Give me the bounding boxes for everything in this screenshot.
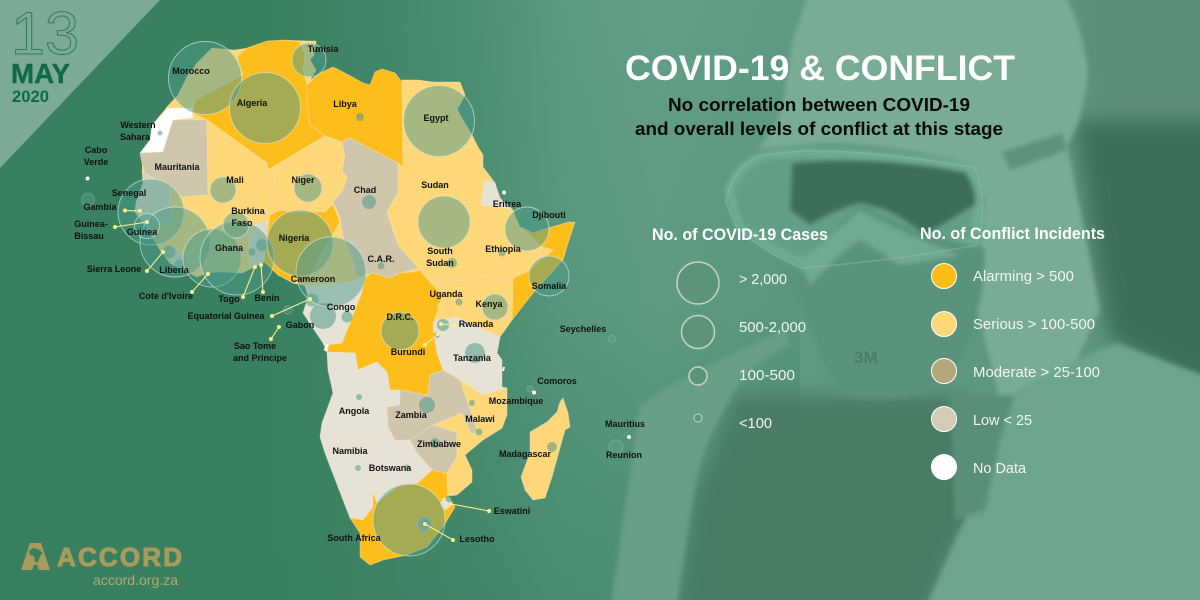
country name labels: Niger	[291, 175, 315, 185]
Western Sahara	[140, 108, 193, 153]
legend: COVID-19 cases: No. of COVID-19 Cases	[652, 226, 828, 244]
country name labels: Burundi	[391, 347, 425, 357]
country name labels: Somalia	[532, 281, 567, 291]
country name labels	[74, 44, 645, 544]
legend: COVID-19 cases: 100-500	[739, 367, 795, 384]
map of Africa	[74, 40, 645, 565]
faint island case circles	[82, 194, 623, 454]
Somalia	[512, 222, 575, 320]
country name labels: Senegal	[112, 188, 146, 198]
country name labels: Tanzania	[453, 353, 492, 363]
legend: conflict incidents: No Data	[973, 460, 1027, 477]
Togo and Benin	[248, 222, 268, 268]
country name labels: Mauritius	[605, 419, 645, 429]
legend: conflict incidents: Serious > 100-500	[973, 316, 1095, 333]
legend: COVID-19 cases: > 2,000	[739, 271, 787, 288]
legend: conflict incidents: No. of Conflict Incidents	[920, 225, 1105, 243]
Madagascar	[521, 398, 570, 500]
Egypt	[402, 80, 478, 148]
Sierra Leone and Liberia	[160, 245, 190, 274]
Angola Cabinda exclave	[324, 344, 329, 352]
legend: COVID-19 cases: 500-2,000	[739, 319, 806, 336]
country name labels: Gambia	[83, 202, 117, 212]
legend: conflict incidents: Low < 25	[973, 412, 1032, 429]
country name labels: Congo	[327, 302, 356, 312]
Algeria	[193, 40, 325, 170]
country name labels: Equatorial Guinea	[187, 311, 266, 321]
Tunisia	[300, 41, 316, 88]
country name labels: Algeria	[237, 98, 268, 108]
country name labels: Cabo	[85, 145, 108, 155]
Eswatini	[440, 498, 452, 510]
country name labels: Uganda	[429, 289, 463, 299]
Sudan, South Sudan and Ethiopia	[387, 147, 553, 282]
country name labels: Eswatini	[494, 506, 530, 516]
country name labels: Seychelles	[560, 324, 606, 334]
ACCORD logo	[21, 542, 182, 588]
Namibia	[320, 437, 380, 520]
month: MAY	[11, 58, 70, 89]
Chad and C.A.R.	[333, 138, 420, 278]
country name labels: Namibia	[332, 446, 368, 456]
photo detail: goggle frame	[726, 151, 983, 268]
country name labels: Cameroon	[291, 274, 335, 284]
photo detail: mask logo: 3M	[854, 348, 878, 367]
country name labels: Rwanda	[459, 319, 494, 329]
country name labels: Ghana	[215, 243, 244, 253]
country name labels: Lesotho	[460, 534, 495, 544]
Lesotho	[417, 516, 432, 533]
country fills	[135, 40, 575, 565]
country name labels: Zambia	[395, 410, 428, 420]
Senegal	[135, 170, 172, 226]
logo icon	[21, 543, 50, 570]
subtitle: and overall levels of conflict at this stage	[635, 119, 1003, 139]
Mauritania	[140, 120, 208, 197]
legend: COVID-19 cases	[652, 226, 828, 432]
island markers	[86, 176, 631, 439]
country name labels: South	[427, 246, 453, 256]
photo detail: goggle strap	[1002, 133, 1067, 170]
Mali, Burkina Faso, Guinea, Cote d'Ivoire and Ghana	[140, 120, 275, 277]
country name labels: Mali	[226, 175, 244, 185]
South Africa	[350, 470, 455, 565]
country name labels: Madagascar	[499, 449, 552, 459]
country name labels: Nigeria	[279, 233, 310, 243]
country name labels: C.A.R.	[368, 254, 394, 264]
country name labels: and Principe	[233, 353, 287, 363]
Uganda and Kenya	[430, 277, 513, 337]
Mozambique	[440, 380, 507, 496]
country name labels: Togo	[218, 294, 240, 304]
website: accord.org.za	[93, 572, 178, 588]
country name labels: Mauritania	[154, 162, 200, 172]
subtitle	[635, 95, 1003, 139]
country name labels: Faso	[231, 218, 253, 228]
photo: health worker in protective gear	[610, 0, 1200, 600]
date number 13: 13	[11, 0, 79, 67]
country name labels: Reunion	[606, 450, 642, 460]
Libya	[307, 67, 403, 167]
Zimbabwe	[410, 425, 457, 473]
country name labels: Angola	[339, 406, 370, 416]
country name labels: Cote d'Ivoire	[139, 291, 193, 301]
Niger	[262, 136, 347, 213]
legend: conflict incidents	[920, 225, 1105, 480]
country name labels: Chad	[354, 185, 376, 195]
country name labels: Sahara	[120, 132, 151, 142]
Zambia and Malawi	[387, 370, 477, 440]
country name labels: Liberia	[159, 265, 190, 275]
year: 2020	[12, 87, 49, 106]
country name labels: Eritrea	[493, 199, 522, 209]
country name labels: D.R.C.	[386, 312, 414, 322]
country name labels: Kenya	[475, 299, 504, 309]
large COVID-19 case circles	[118, 42, 569, 556]
legend: conflict incidents: Moderate > 25-100	[973, 364, 1100, 381]
country name labels: Tunisia	[308, 44, 339, 54]
logo wordmark: ACCORD	[57, 542, 182, 572]
Morocco	[166, 48, 243, 108]
country name labels: Egypt	[423, 113, 449, 123]
Angola	[320, 352, 400, 440]
country name labels: Malawi	[465, 414, 495, 424]
country name labels: Libya	[333, 99, 358, 109]
country name labels: Sierra Leone	[87, 264, 141, 274]
country name labels: Morocco	[172, 66, 210, 76]
subtitle: No correlation between COVID-19	[668, 95, 970, 115]
date corner panel	[0, 0, 160, 168]
Gabon and Congo	[303, 278, 364, 352]
country name labels: Djibouti	[532, 210, 566, 220]
country name labels: Bissau	[74, 231, 104, 241]
Botswana	[372, 440, 432, 503]
country name labels: Sao Tome	[234, 341, 276, 351]
country name labels: Zimbabwe	[417, 439, 461, 449]
country name labels: Sudan	[421, 180, 449, 190]
country name labels: Burkina	[231, 206, 266, 216]
country name labels: Ethiopia	[485, 244, 522, 254]
Tanzania, Rwanda and Burundi	[433, 317, 507, 395]
country name labels: Western	[120, 120, 156, 130]
country name labels: Verde	[84, 157, 108, 167]
title: COVID-19 & CONFLICT	[625, 49, 1015, 88]
Cameroon	[293, 204, 353, 286]
background lower shading	[0, 0, 800, 600]
Eritrea	[481, 180, 513, 210]
country name labels: Sudan	[426, 258, 454, 268]
country name labels: Guinea	[127, 227, 158, 237]
country name labels: Comoros	[537, 376, 577, 386]
country name labels: Guinea-	[74, 219, 108, 229]
country name labels: South Africa	[327, 533, 382, 543]
small COVID-19 case circles	[158, 113, 557, 526]
country name labels: Mozambique	[489, 396, 543, 406]
legend: conflict incidents: Alarming > 500	[973, 268, 1074, 285]
country name labels: Gabon	[286, 320, 314, 330]
country name labels: Botswana	[369, 463, 412, 473]
Africa landmass base	[135, 40, 575, 565]
Nigeria	[264, 204, 340, 283]
legend: COVID-19 cases: <100	[739, 415, 772, 432]
D.R.C.	[327, 270, 443, 395]
connector lines	[113, 208, 491, 542]
country name labels: Benin	[254, 293, 280, 303]
